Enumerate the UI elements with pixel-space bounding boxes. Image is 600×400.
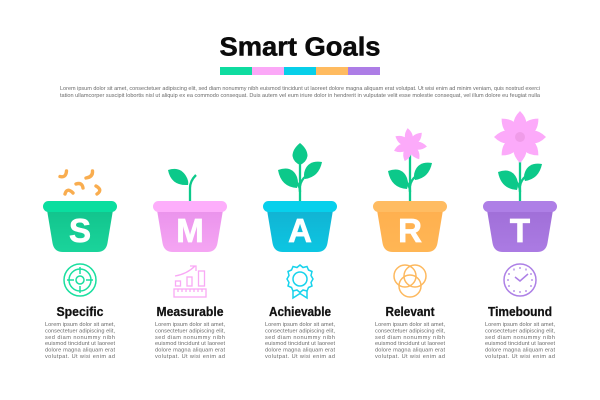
pot R (373, 201, 447, 252)
icon: venn circles (394, 265, 426, 297)
body text: euismod tincidunt ut laoreet (155, 341, 225, 347)
body text: consectetuer adipiscing elit, (265, 328, 335, 334)
body text: Lorem ipsum dolor sit amet, (265, 322, 335, 328)
body text: consectetuer adipiscing elit, (485, 328, 555, 334)
pot A: A (288, 212, 312, 249)
heading: Achievable (269, 305, 331, 319)
colour bar (220, 67, 380, 75)
body text: Lorem ipsum dolor sit amet, (485, 322, 555, 328)
body text: dolore magna aliquam erat (375, 348, 445, 354)
body text: sed diam nonummy nibh (45, 335, 115, 341)
sprout (168, 169, 196, 202)
pot S (43, 201, 117, 252)
pot R: R (398, 212, 422, 249)
body text: Lorem ipsum dolor sit amet, (375, 322, 445, 328)
icon: chart and ruler (174, 266, 206, 297)
body text: euismod tincidunt ut laoreet (265, 341, 335, 347)
heading: Timebound (488, 305, 552, 319)
body text: sed diam nonummy nibh (375, 335, 445, 341)
pot T: T (510, 212, 530, 249)
body text (155, 322, 225, 360)
heading: Measurable (156, 305, 224, 319)
intro text: Lorem ipsum dolor sit amet, consectetuer adipiscing elit, sed diam nonummy nibh euismod tincidunt ut laoreet dolore magna aliquam erat volutpat. Ut wisi enim ad minim veniam, quis nostrud exerci (60, 86, 540, 92)
body text (45, 322, 115, 360)
pot M (153, 201, 227, 252)
body text: sed diam nonummy nibh (485, 335, 555, 341)
panel: timebound (483, 111, 557, 360)
pot M: M (176, 212, 204, 249)
pot A (263, 201, 337, 252)
flower plant (494, 111, 546, 202)
body text: sed diam nonummy nibh (155, 335, 225, 341)
intro text: tation ullamcorper suscipit lobortis nisl ut aliquip ex ea commodo consequat. Duis autem vel eum iriure dolor in hendrerit in vulputate velit esse molestie consequat, vel illum dolore eu feugiat nulla (60, 93, 541, 99)
body text: euismod tincidunt ut laoreet (45, 341, 115, 347)
body text: volutpat. Ut wisi enim ad (45, 354, 115, 360)
pot S: S (69, 212, 91, 249)
flower plant (388, 128, 432, 202)
body text (265, 322, 335, 360)
body text: dolore magna aliquam erat (485, 348, 555, 354)
body text: volutpat. Ut wisi enim ad (485, 354, 555, 360)
body text: sed diam nonummy nibh (265, 335, 335, 341)
icon: clock (504, 264, 536, 296)
icon: award ribbon (287, 265, 313, 298)
body text: dolore magna aliquam erat (45, 348, 115, 354)
body text: consectetuer adipiscing elit, (45, 328, 115, 334)
body text: consectetuer adipiscing elit, (155, 328, 225, 334)
panel: measurable (153, 169, 227, 360)
icon: target (64, 264, 96, 296)
icon: seeds (60, 171, 100, 194)
body text: consectetuer adipiscing elit, (375, 328, 445, 334)
pot T (483, 201, 557, 252)
body text: volutpat. Ut wisi enim ad (265, 354, 335, 360)
body text: dolore magna aliquam erat (265, 348, 335, 354)
heading: Specific (56, 305, 104, 319)
body text: Lorem ipsum dolor sit amet, (45, 322, 115, 328)
plant (278, 143, 322, 202)
body text: Lorem ipsum dolor sit amet, (155, 322, 225, 328)
title: Smart Goals (220, 34, 380, 62)
body text: euismod tincidunt ut laoreet (375, 341, 445, 347)
body text: euismod tincidunt ut laoreet (485, 341, 555, 347)
body text: dolore magna aliquam erat (155, 348, 225, 354)
body text (485, 322, 555, 360)
heading: Relevant (386, 305, 435, 319)
panel: achievable (263, 143, 337, 360)
panel: relevant (373, 128, 447, 360)
body text (375, 322, 445, 360)
intro text (60, 86, 541, 99)
panel: specific (43, 171, 117, 360)
body text: volutpat. Ut wisi enim ad (375, 354, 445, 360)
body text: volutpat. Ut wisi enim ad (155, 354, 225, 360)
